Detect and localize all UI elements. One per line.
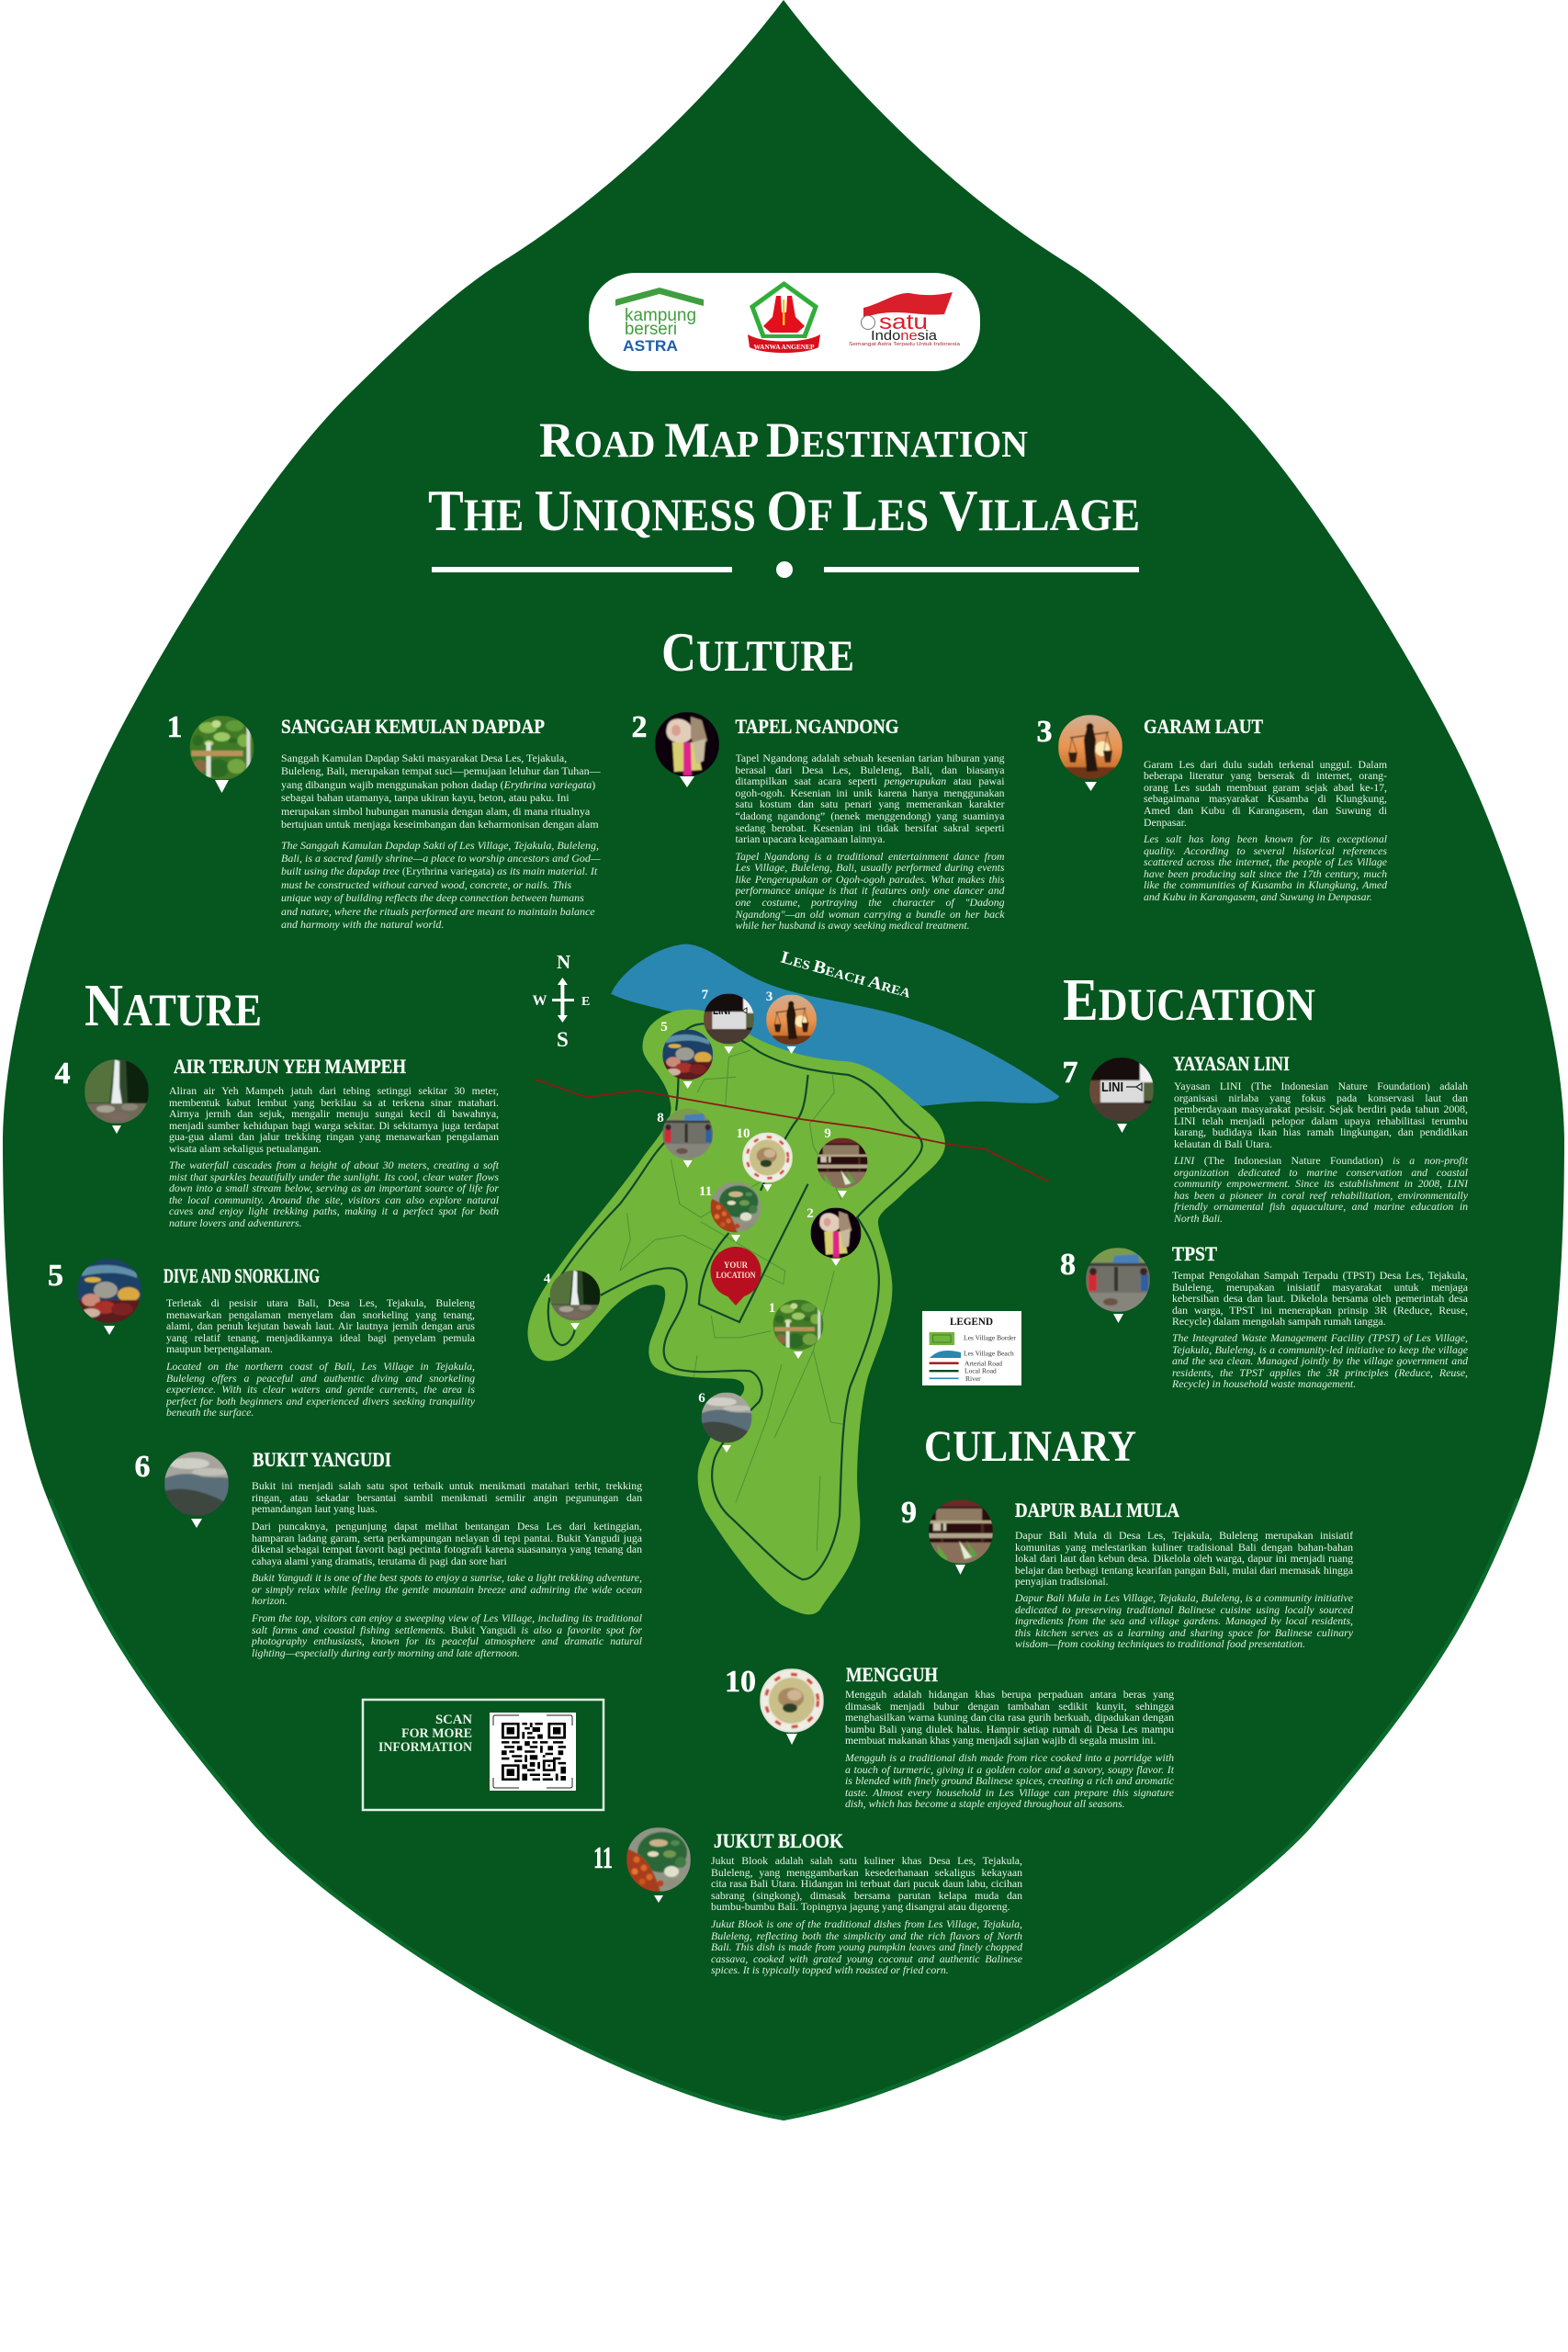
english text: caves and enjoy light trekking paths, making it a perfect spot for both [169, 1204, 499, 1217]
english text: North Bali. [1174, 1212, 1223, 1225]
english text: the local community. Around the site, visitors can also explore natural [169, 1193, 499, 1206]
english text: have been producing salt since the 17th century, much [1144, 867, 1387, 880]
compass: W [533, 993, 547, 1009]
indonesian text [845, 1689, 1174, 1749]
map pin 9: 9 [824, 1126, 831, 1141]
map pin 5: 5 [660, 1020, 668, 1035]
indonesian text: Airnya jernih dan sejuk, mengalir menuju sungai kecil di bawahnya, [169, 1107, 499, 1120]
title line 2: THE UNIQNESS OF LES VILLAGE [428, 478, 1140, 543]
map pin 7 [702, 988, 754, 1054]
english text: community empowerment. Since its establishment in 2008, LINI [1174, 1177, 1468, 1190]
indonesian text 2 [252, 1521, 642, 1568]
indonesian text: cita rasa Bali Utara. Hidangan ini terbuat dari pucuk daun labu, cicihan [711, 1877, 1022, 1890]
english text: Ngandong"—an old woman carrying a bundle on her back [735, 908, 1005, 921]
your location pin [711, 1247, 761, 1306]
indonesian text: beberapa literatur yang berserak di internet, orang- [1144, 769, 1387, 782]
english text: Bali. This dish is made from young pumpkin leaves and finely chopped [711, 1940, 1022, 1953]
english text 2: salt farms and coastal fishing settlements. Bukit Yangudi is also a favorite spot for [252, 1623, 642, 1636]
item title: TPST [1172, 1242, 1217, 1265]
logo: emblem [748, 281, 820, 353]
english text: residents, the TPST applies the 3R principles (Reduce, Reuse, [1172, 1366, 1468, 1379]
heading: culture: CULTURE [661, 622, 854, 683]
english text 1: or simply relax while feeling the gentle mountain breeze and admiring the wide ocean [252, 1583, 642, 1596]
beach area label: LES BEACH AREA [779, 948, 914, 1002]
map pin 3 [766, 989, 817, 1054]
indonesian text: merupakan simbol hubungan manusia dengan alam, di mana ritualnya [281, 805, 590, 818]
scan text: FOR MORE [401, 1726, 472, 1741]
your location pin: LOCATION [716, 1271, 756, 1280]
english text: The Sanggah Kamulan Dapdap Sakti of Les Village, Tejakula, Buleleng, [281, 838, 599, 851]
indonesian text [1174, 1080, 1468, 1152]
map pin 8: 8 [657, 1111, 664, 1125]
map pin 7: 7 [702, 988, 709, 1002]
qr code [490, 1713, 576, 1791]
divider [432, 561, 1139, 578]
indonesian text 2: dikenal sebagai tempat favorit bagi pecinta fotografi karena suasananya yang tenang dan [252, 1543, 642, 1555]
english text: spices. It is typically topped with roasted or fried corn. [711, 1963, 949, 1976]
english text: organization dedicated to marine conservation and coastal [1174, 1166, 1468, 1179]
english text: friendly ornamental fish aquaculture, and marine education in [1174, 1200, 1468, 1213]
item 6: Bukit Yangudi [134, 1448, 642, 1660]
item 9: Dapur Bali Mula [901, 1496, 1353, 1653]
english text: and nature, where the rituals performed are meant to maintain balance [281, 905, 595, 918]
english text 1: horizon. [252, 1594, 288, 1607]
indonesian text: sebagai bahan utamanya, tanpa ukiran kayu, beton, atau paku. Ini [281, 791, 570, 804]
indonesian text: belajar dan berbagi tentang kearifan pangan Bali, mulai dari memasak hingga [1015, 1564, 1353, 1577]
number: 9 [901, 1496, 917, 1530]
number: 8 [1060, 1248, 1076, 1282]
indonesian text [735, 752, 1005, 846]
indonesian text: dimasak menjadi bubur dengan tambahan sedikit kunyit, sehingga [845, 1700, 1174, 1713]
english text [711, 1918, 1022, 1979]
number: 10 [725, 1665, 756, 1699]
scan text [378, 1713, 473, 1755]
title [428, 413, 1140, 578]
item title: BUKIT YANGUDI [253, 1448, 391, 1471]
photo pin [77, 1259, 141, 1335]
map pin 6 [698, 1391, 751, 1453]
item title: DAPUR BALI MULA [1015, 1498, 1179, 1521]
photo pin [760, 1668, 824, 1745]
compass: E [581, 995, 590, 1009]
indonesian text: organisasi nirlaba yang fokus pada konservasi laut dan [1174, 1091, 1468, 1104]
item 10: Mengguh [725, 1663, 1174, 1813]
indonesian text: kebersihan desa dan laut. Dikelola bersama oleh pemerintah desa [1172, 1292, 1468, 1305]
english text: down into a small stream below, serving as an important source of life for [169, 1182, 499, 1194]
scan text: INFORMATION [378, 1740, 472, 1755]
village land and roads [527, 1010, 1049, 1614]
english text: while her husband is away seeking medical treatment. [735, 919, 970, 932]
number: 11 [593, 1841, 613, 1875]
number: 4 [55, 1057, 70, 1091]
english text: this kitchen serves as a learning and sharing space for Balinese culinary [1015, 1626, 1353, 1639]
english text: and Kubu in Karangasem, and Suwung in Denpasar. [1144, 890, 1372, 903]
item 8: TPST [1060, 1242, 1468, 1393]
indonesian text: membuat makanan khas yang menjadi sajian wajib di segala musim ini. [845, 1734, 1156, 1747]
logo: satu indonesia: Indonesia [871, 328, 938, 344]
legend: Les Village Beach [964, 1349, 1014, 1358]
indonesian text: yang relatif tenang, menjadikannya ideal bagi penyelam pemula [166, 1331, 475, 1344]
indonesian text [166, 1297, 475, 1358]
item title: YAYASAN LINI [1173, 1052, 1290, 1075]
photo pin [655, 712, 719, 787]
english text [1174, 1155, 1468, 1227]
photo pin [1058, 715, 1122, 791]
heading: nature: NATURE [85, 972, 262, 1039]
english text: Les Village, Buleleng, Bali, usually performed during events [735, 861, 1005, 874]
map pin 7: LINI [713, 1003, 730, 1017]
indonesian text: Sanggah Kamulan Dapdap Sakti masyarakat Desa Les, Tejakula, [281, 752, 567, 764]
english text [1172, 1332, 1468, 1393]
photo pin [1089, 1057, 1154, 1133]
photo pin [1086, 1248, 1150, 1323]
english text: Buleleng offers a peaceful and authentic diving and snorkeling [166, 1372, 475, 1385]
indonesian text: menjadi sumber kehidupan bagi warga sekitar. Di sekitarnya juga terdapat [169, 1119, 499, 1132]
english text: quality. According to several historical references [1144, 844, 1387, 857]
indonesian text: sabrang (singkong), dimasak bersama parutan kelapa muda dan [711, 1889, 1022, 1902]
map pin 1: 1 [769, 1301, 775, 1316]
map pin 11 [699, 1182, 761, 1242]
number: 7 [1062, 1056, 1078, 1090]
indonesian text [1172, 1270, 1468, 1330]
photo pin [164, 1452, 229, 1528]
indonesian text: menawarkan pengalaman menyelam dan snorkeling yang tenang, [166, 1308, 475, 1321]
logo: satu indonesia: satu [879, 310, 928, 334]
logo: emblem: WANWA ANGENEP [753, 343, 815, 351]
map pin 4: 4 [544, 1272, 551, 1286]
map pin 2: 2 [807, 1206, 814, 1221]
indonesian text: pemberdayaan masyarakat pesisir. Sejak berdiri pada tahun 2008, [1174, 1102, 1468, 1115]
indonesian text: berasal dari Desa Les, Buleleng, Bali, dan biasanya [735, 763, 1005, 776]
indonesian text: tarian upacara keagamaan lainnya. [735, 832, 886, 845]
item 3: Garam Laut [1036, 715, 1387, 905]
english text: Bali, is a sacred family shrine—a place to worship ancestors and God— [281, 852, 601, 865]
indonesian text: gua-gua alami dan jalur trekking ringan yang menawarkan pengalaman [169, 1130, 499, 1143]
english text: Recycle) in household waste management. [1172, 1377, 1356, 1390]
indonesian text: Recycle) dalam mengolah sampah rumah tangga. [1172, 1315, 1386, 1328]
indonesian text 1: ringan, atau sekadar bersantai sambil menikmati semilir angin pegunungan dan [252, 1491, 642, 1504]
item title: TAPEL NGANDONG [735, 715, 898, 738]
english text: has been a pioneer in coral reef rehabilitation, environmentally [1174, 1189, 1468, 1202]
heading: education: EDUCATION [1063, 967, 1315, 1034]
photo pin [85, 1059, 149, 1134]
english text: like Pengerupukan or Ogoh-ogoh parades. What makes this [735, 873, 1005, 886]
indonesian text: bertujuan untuk menjaga keseimbangan dan keharmonisan dengan alam [281, 818, 599, 831]
indonesian text: penyajian tradisional. [1015, 1575, 1109, 1588]
english text: performance unique is that it features only one dancer and [735, 884, 1005, 897]
map pin 10 [737, 1126, 793, 1192]
indonesian text [1144, 759, 1387, 831]
item title: JUKUT BLOOK [714, 1829, 843, 1852]
indonesian text: maupun berpengalaman. [166, 1342, 273, 1355]
photo pin [626, 1827, 691, 1903]
number: 3 [1036, 715, 1053, 749]
number: 6 [134, 1450, 151, 1484]
english text 2: lighting—especially during early morning and late afternoon. [252, 1646, 520, 1659]
indonesian text: Buleleng, Bali, merupakan tempat suci—pemujaan leluhur dan Tuhan— [281, 764, 601, 777]
indonesian text [281, 752, 612, 834]
indonesian text 1 [252, 1480, 642, 1517]
beach area [611, 944, 1059, 1106]
number: 5 [48, 1259, 63, 1293]
indonesian text: kelautan di Bali Utara. [1174, 1137, 1272, 1150]
item 1: Sanggah Kemulan Dapdap [167, 710, 612, 933]
english text: nature lovers and adventurers. [169, 1216, 302, 1229]
qr callout [363, 1700, 604, 1810]
map [527, 944, 1059, 1614]
english text: ingredients from the sea and village gardens. Managed by local residents, [1015, 1614, 1353, 1627]
indonesian text: sedang berobat. Kesenian ini tidak bersifat sakral seperti [735, 821, 1005, 834]
indonesian text: yang dibangun wajib menggunakan pohon dadap (Erythrina variegata) [281, 778, 595, 791]
english text [845, 1752, 1174, 1813]
indonesian text: lokal dari laut dan kebun desa. Dikelola oleh warga, dapur ini menjadi ruang [1015, 1552, 1353, 1565]
qr frame [363, 1700, 604, 1810]
indonesian text: satu kostum dan satu penari yang memerankan karakter [735, 797, 1005, 810]
indonesian text: LINI telah menjadi pelopor dalam upaya rehabilitasi terumbu [1174, 1114, 1468, 1127]
item 5: Dive and Snorkling [48, 1259, 475, 1421]
indonesian text: alami, dan penuh kejutan bawah laut. Air lautnya jernih dengan arus [166, 1319, 475, 1332]
indonesian text: ogoh-ogoh. Kesenian ini unik karena hanya menggunakan [735, 786, 1005, 799]
logo: kampung berseri astra: ASTRA [623, 337, 678, 355]
compass [533, 951, 590, 1051]
logo: kampung berseri astra: berseri [625, 320, 677, 339]
english text: Tejakula, Buleleng, is a community-led initiative to keep the village [1172, 1343, 1468, 1356]
english text: scattered across the internet, the people of Les Village [1144, 855, 1387, 868]
english text: is blended with finely ground Balinese spices, creating a rich and aromatic [845, 1774, 1174, 1787]
legend: River [965, 1374, 981, 1383]
english text: mist that sparkles beautifully under the sunlight. Its cool, clear water flows [169, 1170, 499, 1183]
legend: Les Village Border [964, 1334, 1016, 1341]
english text: and the sea clean. Managed jointly by the village government and [1172, 1354, 1468, 1367]
english text: a touch of turmeric, giving it a golden color and a savory, soupy flavor. It [845, 1763, 1174, 1776]
number: 2 [632, 710, 647, 744]
logo: satu indonesia [849, 292, 961, 347]
legend: Local Road [964, 1367, 997, 1374]
english text: must be constructed without carved wood, concrete, or nails. This [281, 878, 571, 891]
legend: Arterial Road [964, 1360, 1002, 1367]
logo: satu indonesia: Semangat Astra Terpadu Untuk Indonesia [849, 342, 961, 347]
english text: beneath the surface. [166, 1406, 254, 1419]
indonesian text: orang Les sudah membuat garam sejak abad ke-17, [1144, 781, 1387, 794]
english text 1 [252, 1572, 642, 1609]
legend [922, 1311, 1021, 1385]
item title: SANGGAH KEMULAN DAPDAP [281, 715, 545, 738]
map pin 9 [818, 1126, 867, 1198]
indonesian text [1015, 1530, 1353, 1590]
indonesian text: Denpasar. [1144, 816, 1187, 829]
map pin 8 [657, 1108, 713, 1168]
indonesian text: komunitas yang melestarikan kuliner tradisional Bali dengan bahan-bahan [1015, 1541, 1353, 1554]
compass: N [557, 951, 570, 973]
map pin 10: 10 [737, 1126, 750, 1141]
indonesian text: bumbu Bali yang diulek halus. Hampir setiap rumah di Desa Les mampu [845, 1723, 1174, 1736]
logo: kampung berseri astra [615, 288, 704, 355]
logo: kampung berseri astra: kampung [625, 306, 696, 325]
english text: perfect for both beginners and experienced divers seeking tranquility [166, 1395, 475, 1408]
english text [169, 1159, 499, 1231]
heading: culinary: CULINARY [924, 1422, 1136, 1471]
english text: and harmony with the natural world. [281, 918, 444, 931]
english text: experience. With its clear waters and gentle currents, the area is [166, 1383, 475, 1396]
english text 2: photography enthusiasts, known for its peaceful atmosphere and dramatic natural [252, 1634, 642, 1647]
english text: dedicated to preserving traditional Balinese cuisine using locally sourced [1015, 1603, 1353, 1616]
map pin 6: 6 [698, 1391, 705, 1406]
indonesian text: dan warga, TPST ini menerapkan prinsip 3R (Reduce, Reuse, [1172, 1304, 1468, 1317]
indonesian text: sebagaimana masyarakat Kusamba di Klungkung, [1144, 792, 1387, 805]
map pin 5 [660, 1020, 713, 1089]
english text: like the communities of Kusamba in Klungkung, Amed [1144, 878, 1387, 891]
english text [281, 838, 612, 933]
item 7: Yayasan LINI [1062, 1052, 1468, 1227]
indonesian text: “dadong ngandong” (nenek menggendong) yang suaminya [735, 809, 1005, 822]
english text [1144, 833, 1387, 905]
item title: AIR TERJUN YEH MAMPEH [174, 1055, 406, 1078]
indonesian text: menghasilkan warna kuning dan cita rasa gurih berkuah, dipadukan dengan [845, 1711, 1174, 1724]
indonesian text 1: pemandangan laut yang luas. [252, 1502, 378, 1515]
indonesian text: membentuk kabut lembut yang berkilau sa at terkena sinar matahari. [169, 1096, 499, 1109]
scan text: SCAN [435, 1713, 473, 1727]
indonesian text: karang, budidaya ikan hias ramah lingkungan, dan pendidikan [1174, 1125, 1468, 1138]
indonesian text [169, 1085, 499, 1157]
compass: S [557, 1028, 569, 1051]
legend: LEGEND [950, 1315, 993, 1328]
item title: DIVE AND SNORKLING [164, 1264, 320, 1287]
map pin 1 [769, 1299, 823, 1359]
english text: Buleleng, reflecting both the simplicity and the rich flavors of North [711, 1929, 1022, 1942]
english text [1015, 1592, 1353, 1653]
indonesian text: bumbu-bumbu Bali. Topingnya jagung yang disangrai atau digoreng. [711, 1900, 1010, 1913]
english text [735, 851, 1005, 933]
map pin 11: 11 [699, 1184, 712, 1199]
english text: cassava, cooked with grated young coconut and authentic Balinese [711, 1952, 1022, 1965]
indonesian text 2: hamparan ladang garam, serta perkampungan nelayan di tepi pantai. Bukit Yangudi juga [252, 1532, 642, 1544]
item 2: Tapel Ngandong [632, 710, 1005, 933]
item title: GARAM LAUT [1144, 715, 1263, 738]
photo pin [929, 1499, 993, 1575]
your location pin: YOUR [724, 1261, 748, 1270]
indonesian text [711, 1855, 1022, 1916]
item 11: Jukut Blook [593, 1827, 1022, 1979]
item 4: Air Terjun Yeh Mampeh [55, 1055, 499, 1231]
map pin 2 [807, 1206, 862, 1266]
map pin 4 [544, 1270, 601, 1330]
english text 2 [252, 1612, 642, 1660]
photo pin: LINI [1101, 1080, 1123, 1095]
indonesian text 2: cahaya alami yang dramatis, terutama di pagi dan sore hari [252, 1555, 507, 1567]
indonesian text: wisata alam sekaligus petualangan. [169, 1142, 321, 1155]
english text: unique way of building reflects the deep connection between humans [281, 891, 584, 904]
english text: one costume, portraying the character of "Dadong [735, 896, 1005, 909]
english text: wisdom—from cooking techniques to traditional food presentation. [1015, 1637, 1305, 1650]
title line 1: ROAD MAP DESTINATION [539, 413, 1028, 468]
indonesian text: Buleleng, yang menggambarkan kesederhanaan sekaligus kekayaan [711, 1866, 1022, 1879]
map pin 3: 3 [766, 989, 773, 1004]
english text [166, 1361, 475, 1421]
number: 1 [167, 710, 182, 744]
indonesian text: Buleleng, merupakan inisiatif masyarakat untuk menjaga [1172, 1281, 1468, 1294]
english text: built using the dapdap tree (Erythrina variegata) as its main material. It [281, 865, 597, 877]
indonesian text: Amed dan Kubu di Karangasem, dan Suwung di [1144, 804, 1387, 817]
english text: taste. Almost every household in Les Village can prepare this signature [845, 1786, 1174, 1799]
logo pill [589, 273, 980, 371]
photo pin [189, 716, 254, 793]
indonesian text: ditampilkan saat acara seperti pengerupukan atau pawai [735, 775, 1005, 787]
item title: MENGGUH [846, 1663, 938, 1686]
english text: dish, which has become a staple enjoyed throughout all seasons. [845, 1797, 1125, 1810]
